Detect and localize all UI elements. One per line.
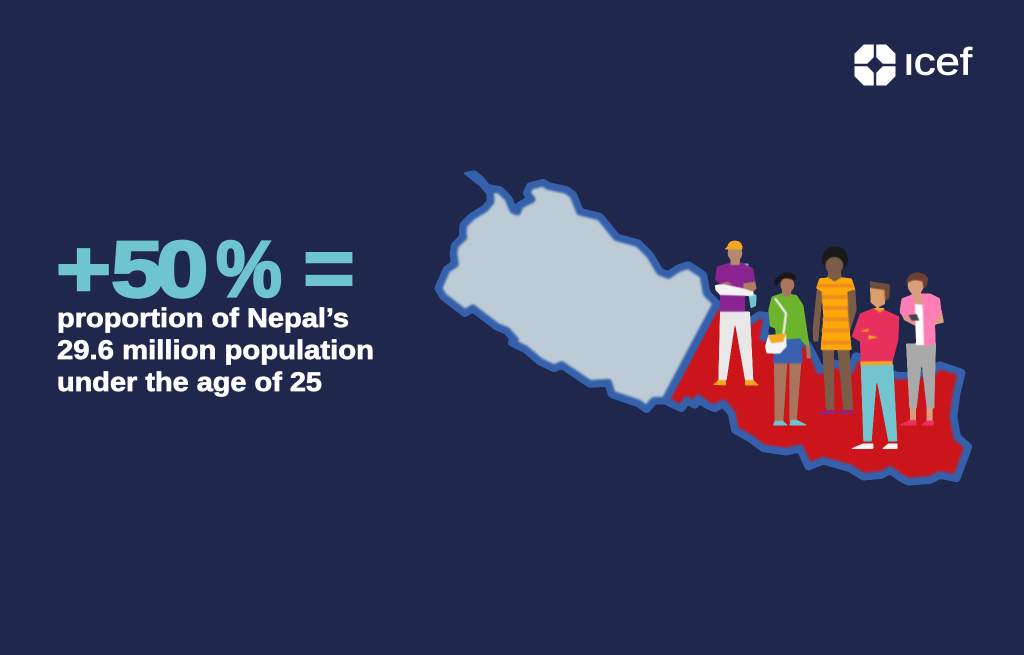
person: woman in pink cardigan with phone bbox=[897, 273, 944, 426]
equals sign: = bbox=[303, 221, 355, 315]
description text: proportion of Nepal’s bbox=[57, 303, 349, 333]
map: grey portion bbox=[438, 170, 717, 409]
description text bbox=[57, 303, 374, 397]
headline statistic: % bbox=[216, 224, 282, 314]
person: woman in green hoodie bbox=[765, 273, 811, 426]
person: woman in striped orange dress bbox=[813, 246, 857, 414]
description text: 29.6 million population bbox=[57, 335, 374, 365]
description text: under the age of 25 bbox=[57, 367, 322, 397]
headline statistic: +50 bbox=[56, 224, 209, 314]
map: red portion under 25 bbox=[665, 303, 968, 482]
logo wordmark: icef bbox=[904, 42, 973, 84]
headline statistic bbox=[56, 224, 282, 314]
icon: icef octagon mark bbox=[854, 44, 896, 86]
person: man in red sweater and teal trousers bbox=[850, 281, 899, 449]
people group bbox=[713, 241, 944, 449]
logo: icef bbox=[854, 42, 973, 86]
person: man in purple shirt and cap bbox=[713, 241, 759, 385]
map: Nepal bbox=[438, 170, 968, 482]
